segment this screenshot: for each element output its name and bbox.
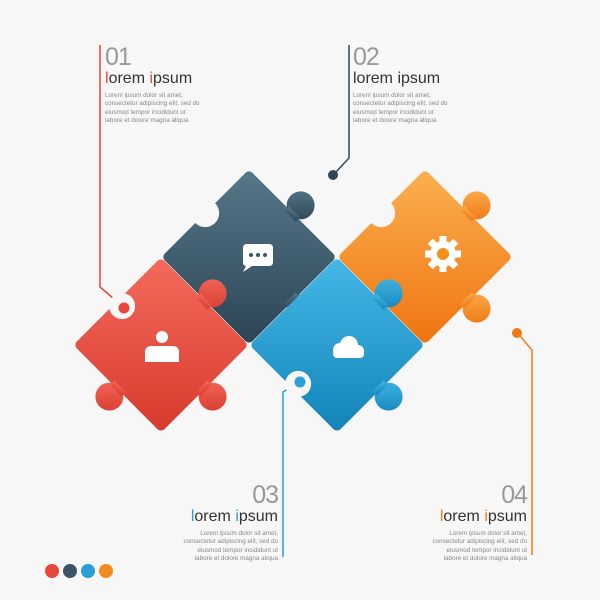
- text block 04: eiusmod tempor incididunt ut: [446, 547, 527, 554]
- text block 01: 01: [105, 43, 131, 71]
- text block 02: consectetur adipiscing elit, sed do: [353, 100, 448, 107]
- text block 04: Lorem ipsum dolor sit amet,: [449, 530, 527, 537]
- text block 02: 02: [353, 43, 379, 71]
- icon: person: [145, 331, 179, 362]
- text block 03: 03: [252, 481, 278, 509]
- text block 03: [183, 481, 278, 562]
- text block 04: labore et dolore magna aliqua: [444, 555, 527, 562]
- text block 01: lorem ipsum: [105, 70, 192, 87]
- text block 02: eiusmod tempor incididunt ut: [353, 109, 434, 116]
- text block 03: labore et dolore magna aliqua: [195, 555, 278, 562]
- puzzle piece: orange: [327, 142, 548, 362]
- connector lines: [100, 45, 532, 557]
- icon: chat bubble: [243, 244, 273, 272]
- text block 02: [353, 43, 448, 124]
- text block 01: Lorem ipsum dolor sit amet,: [105, 92, 183, 99]
- text block 02: lorem ipsum: [353, 70, 440, 87]
- icon: gear: [425, 236, 461, 272]
- text block 01: consectetur adipiscing elit, sed do: [105, 100, 200, 107]
- puzzle piece: dark: [151, 142, 372, 362]
- text block 02: Lorem ipsum dolor sit amet,: [353, 92, 431, 99]
- text block 03: consectetur adipiscing elit, sed do: [183, 538, 278, 545]
- text block 01: labore et dolore magna aliqua: [105, 117, 188, 124]
- text block 02: labore et dolore magna aliqua: [353, 117, 436, 124]
- text block 04: lorem ipsum: [440, 508, 527, 525]
- icon: cloud: [333, 336, 364, 358]
- connector dots: [118, 170, 522, 388]
- puzzle piece: blue: [245, 240, 460, 455]
- text block 03: Lorem ipsum dolor sit amet,: [200, 530, 278, 537]
- legend dots: [45, 564, 113, 578]
- text block 04: consectetur adipiscing elit, sed do: [432, 538, 527, 545]
- text block 04: 04: [501, 481, 527, 509]
- text block 04: [432, 481, 528, 562]
- text block 03: lorem ipsum: [191, 508, 278, 525]
- text block 01: eiusmod tempor incididunt ut: [105, 109, 186, 116]
- puzzle piece: red: [51, 235, 284, 468]
- text block 03: eiusmod tempor incididunt ut: [197, 547, 278, 554]
- text block 01: [105, 43, 200, 124]
